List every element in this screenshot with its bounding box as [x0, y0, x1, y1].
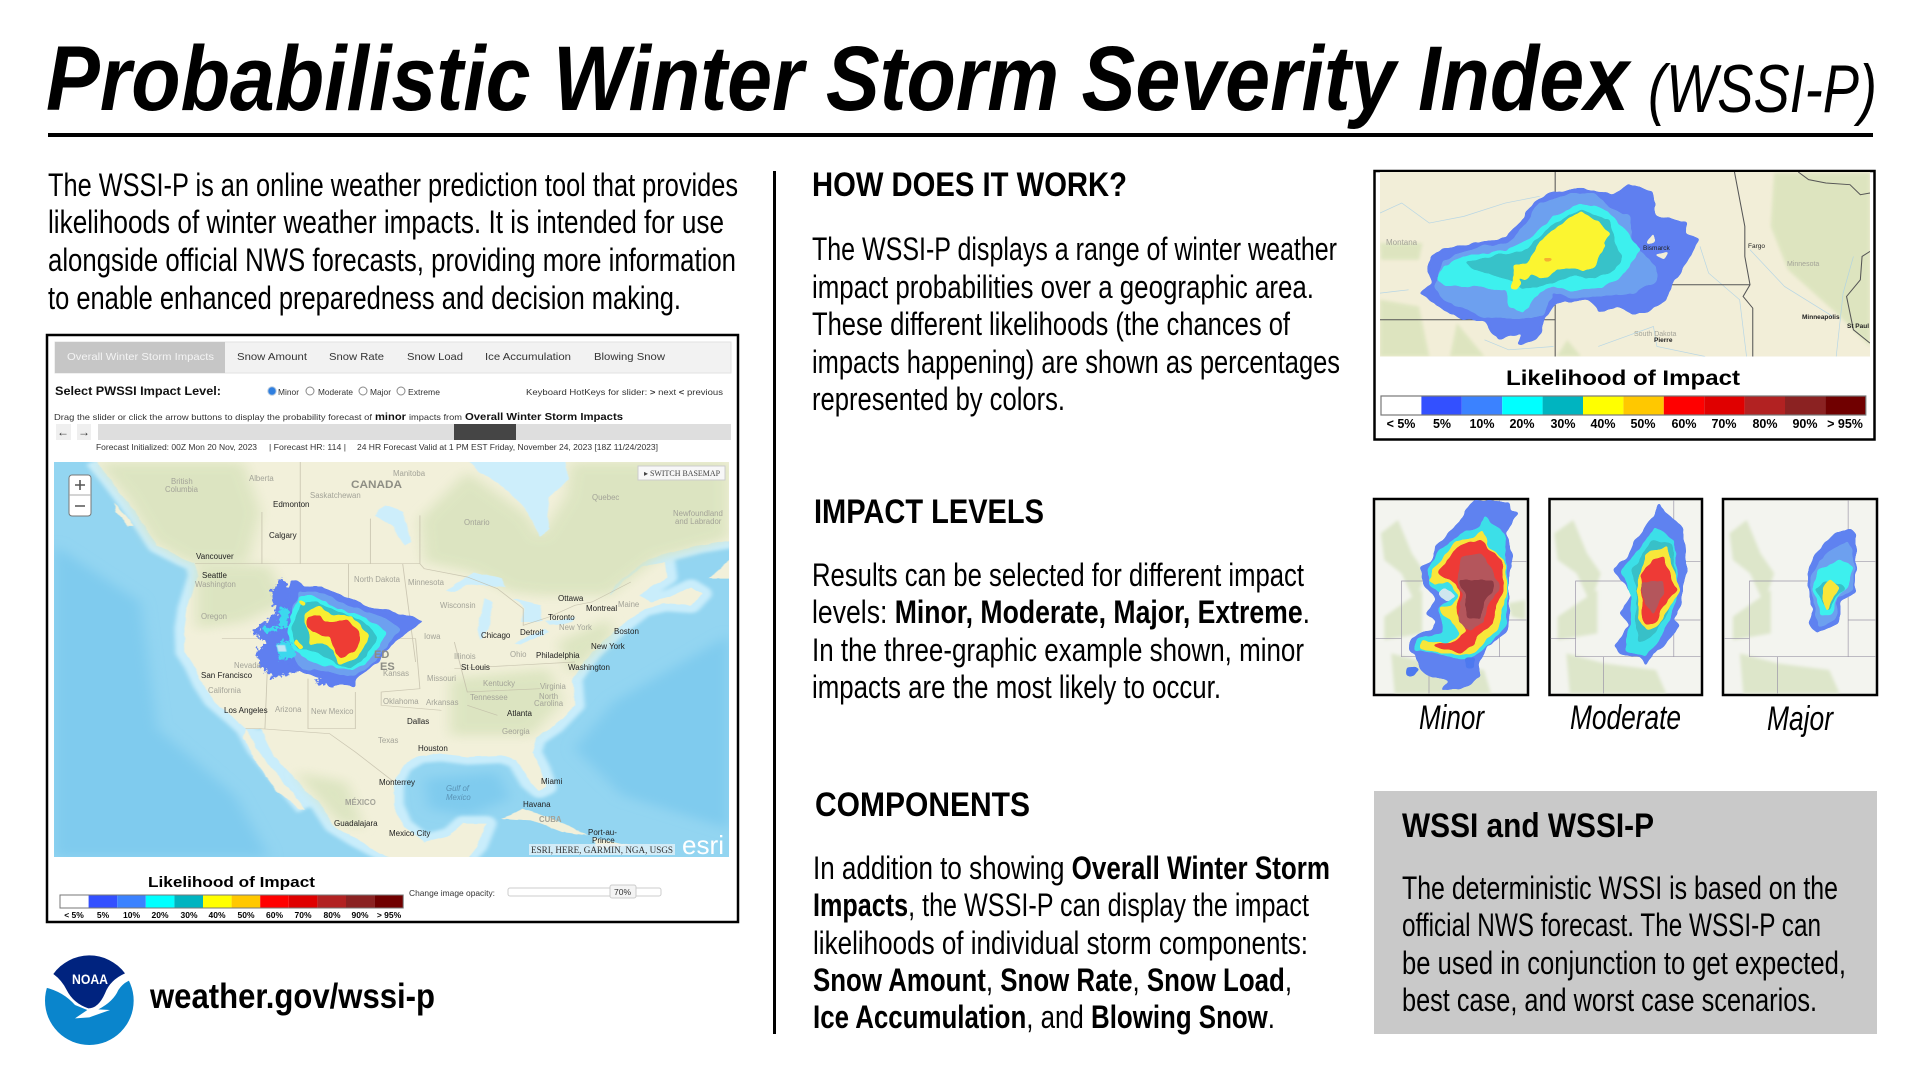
switch basemap button: ▸ SWITCH BASEMAP	[644, 469, 721, 478]
text: impact levels	[812, 557, 1310, 705]
intro text: to enable enhanced preparedness and decision making.	[48, 280, 681, 316]
forecast time text: Forecast Initialized: 00Z Mon 20 Nov, 2023	[96, 443, 258, 452]
forecast time text	[96, 443, 658, 452]
map labels: Washington	[195, 580, 236, 589]
map labels: ES	[380, 661, 395, 673]
map labels: Oregon	[201, 612, 227, 621]
text: components: Ice Accumulation, and Blowing Snow.	[813, 999, 1275, 1035]
text: components: likelihoods of individual storm components:	[813, 925, 1308, 961]
panel: WSSI and WSSI-P	[1374, 791, 1877, 1034]
intro text: The WSSI-P is an online weather prediction tool that provides	[48, 167, 738, 203]
map labels: Newfoundland	[673, 509, 723, 518]
map labels: MÉXICO	[345, 798, 376, 807]
website URL: weather.gov/wssi-p	[149, 977, 435, 1016]
map labels: Miami	[541, 777, 563, 786]
tab bar: Overall Winter Storm Impacts	[67, 351, 214, 363]
intro text: alongside official NWS forecasts, providing more information	[48, 242, 736, 278]
map labels: New York	[559, 623, 592, 632]
legend labels: 80%	[1752, 417, 1778, 431]
impact level selector: Minor	[278, 387, 299, 397]
map: moderate impacts	[1550, 499, 1702, 695]
text: impact levels: In the three-graphic example shown, minor	[812, 632, 1304, 668]
map labels: South Dakota	[1634, 331, 1677, 338]
map labels: Toronto	[548, 613, 575, 622]
screenshot legend: 40%	[208, 910, 226, 920]
text: components	[813, 850, 1330, 1035]
tab bar: Ice Accumulation	[485, 351, 571, 363]
screenshot legend: 30%	[180, 910, 198, 920]
map labels: Port-au-	[588, 828, 617, 837]
panel text: best case, and worst case scenarios.	[1402, 982, 1817, 1018]
screenshot legend: 50%	[237, 910, 255, 920]
land	[95, 460, 731, 859]
map labels: Arkansas	[426, 698, 459, 707]
map labels: Philadelphia	[536, 651, 580, 660]
map labels: Gulf of	[446, 784, 470, 793]
map labels: CANADA	[351, 479, 402, 491]
map attribution and esri logo: esri	[682, 830, 724, 860]
legend labels: 90%	[1792, 417, 1818, 431]
screenshot legend: 10%	[123, 910, 140, 920]
screenshot legend: < 5%	[64, 910, 84, 920]
legend labels: 10%	[1469, 417, 1495, 431]
map labels: North Dakota	[354, 575, 401, 584]
map labels: Texas	[378, 736, 398, 745]
caption: Major: Major	[1767, 700, 1834, 738]
forecast time slider: →	[78, 425, 90, 439]
map labels: Alberta	[249, 474, 274, 483]
baja and islands	[114, 502, 731, 849]
opacity slider: Change image opacity:	[409, 888, 495, 898]
screenshot legend: > 95%	[377, 910, 402, 920]
slider instructions: Drag the slider or click the arrow buttons to display the probability forecast of	[54, 412, 373, 422]
forecast time slider	[56, 424, 731, 440]
map labels: and Labrador	[675, 517, 722, 526]
screenshot legend: 80%	[323, 910, 341, 920]
hudson bay and lakes	[375, 460, 575, 645]
map labels: Virginia	[540, 682, 567, 691]
text: components: In addition to showing Overall Winter Storm	[813, 850, 1330, 886]
intro text: likelihoods of winter weather impacts. It is intended for use	[48, 204, 724, 240]
map of North America with probability overlay	[54, 460, 731, 920]
NOAA logo: NOAA	[72, 971, 108, 987]
map labels: Minnesota	[408, 578, 445, 587]
map attribution and esri logo	[529, 830, 724, 860]
legend labels: 20%	[1509, 417, 1535, 431]
text: impact levels: impacts are the most likely to occur.	[812, 669, 1221, 705]
map labels: Illinois	[454, 652, 476, 661]
map labels: Mexico City	[389, 829, 430, 838]
slider instructions: minor	[375, 411, 406, 423]
map labels: Carolina	[534, 699, 564, 708]
opacity slider	[409, 885, 661, 898]
map labels: Ottawa	[558, 594, 584, 603]
screenshot legend: 20%	[151, 910, 169, 920]
impact level selector: Extreme	[408, 387, 440, 397]
map attribution and esri logo: ESRI, HERE, GARMIN, NGA, USGS	[531, 845, 673, 855]
forest and mountain tints	[97, 462, 729, 829]
map labels: CUBA	[539, 815, 562, 824]
tab bar: Blowing Snow	[594, 351, 665, 363]
slider instructions	[54, 411, 623, 423]
text: how does it work: impacts happening) are shown as percentages	[812, 344, 1340, 380]
map: major impacts	[1723, 499, 1877, 695]
map labels: Nevada	[234, 661, 262, 670]
column divider	[773, 171, 776, 1034]
map labels: New Mexico	[311, 707, 354, 716]
panel text	[1402, 870, 1846, 1018]
forecast time slider: ←	[57, 425, 69, 439]
text: components: Snow Amount, Snow Rate, Snow Load,	[813, 962, 1292, 998]
map labels: Kentucky	[483, 679, 515, 688]
heading: impact levels: IMPACT LEVELS	[814, 493, 1044, 531]
text: how does it work: represented by colors.	[812, 381, 1065, 417]
map labels: California	[208, 686, 242, 695]
panel: likelihood map with legend	[1374, 171, 1874, 440]
legend labels: < 5%	[1387, 417, 1415, 431]
forecast time text: 24 HR Forecast Valid at 1 PM EST Friday, November 24, 2023 [18Z 11/24/2023]	[357, 443, 658, 452]
legend color bar	[1381, 396, 1866, 415]
map labels: St Paul	[1847, 323, 1869, 330]
map labels: Los Angeles	[224, 706, 268, 715]
map labels: Vancouver	[196, 552, 234, 561]
map labels: Boston	[614, 627, 639, 636]
text: impact levels: levels: Minor, Moderate, Major, Extreme.	[812, 594, 1310, 630]
deep water shading	[54, 545, 729, 857]
map labels: Ontario	[464, 518, 490, 527]
tab bar: Snow Rate	[329, 351, 384, 363]
map labels: Manitoba	[393, 469, 426, 478]
screenshot legend	[60, 874, 403, 920]
forecast time text: | Forecast HR: 114 |	[269, 443, 346, 452]
impact level selector	[55, 386, 723, 398]
map labels: British	[171, 477, 193, 486]
heading: how does it work: HOW DOES IT WORK?	[812, 166, 1127, 204]
screenshot legend: Likelihood of Impact	[148, 874, 315, 891]
impact level selector: Moderate	[318, 387, 353, 397]
map labels: Quebec	[592, 493, 619, 502]
map labels: St Louis	[461, 663, 490, 672]
storm probability overlay	[250, 578, 422, 688]
map labels: Minneapolis	[1802, 314, 1840, 321]
legend labels: 5%	[1433, 417, 1451, 431]
map labels: Calgary	[269, 531, 297, 540]
map labels: Minnesota	[1787, 261, 1819, 268]
map labels: San Francisco	[201, 671, 253, 680]
panel heading: WSSI and WSSI-P	[1402, 807, 1654, 845]
map labels: Columbia	[165, 485, 199, 494]
heading: components: COMPONENTS	[815, 786, 1030, 824]
opacity slider: 70%	[614, 887, 631, 897]
map labels: Missouri	[427, 674, 456, 683]
switch basemap button	[638, 466, 725, 480]
map labels: Havana	[523, 800, 551, 809]
screenshot legend: 60%	[266, 910, 283, 920]
map labels: Montreal	[586, 604, 617, 613]
map: minor impacts	[1374, 499, 1528, 695]
legend labels: 30%	[1550, 417, 1576, 431]
text: how does it work: impact probabilities over a geographic area.	[812, 269, 1314, 305]
map labels: Maine	[618, 600, 639, 609]
legend labels: 50%	[1630, 417, 1656, 431]
tab bar: Snow Load	[407, 351, 463, 363]
fragmented fringe	[252, 578, 303, 678]
impact level selector: Select PWSSI Impact Level:	[55, 386, 221, 398]
map labels: Guadalajara	[334, 819, 378, 828]
impact level selector: Keyboard HotKeys for slider: > next < previous	[526, 387, 723, 397]
map labels	[1386, 238, 1869, 344]
map labels: Kansas	[383, 669, 409, 678]
title: Probabilistic Winter Storm Severity Index	[46, 28, 1632, 130]
tab bar: Snow Amount	[237, 351, 307, 363]
map labels: Wisconsin	[440, 601, 476, 610]
map labels: Saskatchewan	[310, 491, 361, 500]
map labels: Prince	[592, 836, 615, 845]
map labels: Oklahoma	[383, 697, 419, 706]
NOAA logo	[45, 955, 134, 1045]
map labels: Arizona	[275, 705, 302, 714]
map labels: Pierre	[1654, 337, 1673, 344]
map labels: Seattle	[202, 571, 227, 580]
map labels: Chicago	[481, 631, 511, 640]
text: impact levels: Results can be selected for different impact	[812, 557, 1304, 593]
screenshot legend: 5%	[97, 910, 110, 920]
map labels: Mexico	[446, 793, 471, 802]
text: how does it work	[812, 231, 1340, 417]
fringe streaks and salt lake gap	[263, 607, 297, 660]
screenshot legend: 90%	[351, 910, 369, 920]
text: how does it work: These different likelihoods (the chances of	[812, 306, 1290, 342]
map labels: Edmonton	[273, 500, 309, 509]
map labels: North	[539, 692, 558, 701]
tab bar	[55, 342, 731, 373]
map: northern plains probabilities	[1380, 172, 1870, 356]
map labels: Fargo	[1748, 243, 1765, 250]
map labels	[165, 469, 723, 845]
map labels: Bismarck	[1643, 245, 1670, 252]
legend labels: 70%	[1711, 417, 1737, 431]
map labels: Detroit	[520, 628, 544, 637]
legend labels: > 95%	[1827, 417, 1863, 431]
map labels: Montana	[1386, 238, 1418, 247]
map labels: Washington	[568, 663, 610, 672]
coastal shelf	[95, 460, 731, 857]
legend labels: 40%	[1590, 417, 1616, 431]
map labels: Tennessee	[470, 693, 508, 702]
screenshot legend: 70%	[294, 910, 312, 920]
map labels: Atlanta	[507, 709, 532, 718]
map labels: ED	[374, 649, 389, 661]
map labels: New York	[591, 642, 626, 651]
text: components: Impacts, the WSSI-P can display the impact	[813, 887, 1309, 923]
panel: WSSI-P web tool screenshot	[45, 166, 1877, 1045]
map labels: Georgia	[502, 727, 530, 736]
map zoom control	[69, 475, 91, 516]
caption: Moderate: Moderate	[1570, 699, 1681, 737]
text: how does it work: The WSSI-P displays a range of winter weather	[812, 231, 1337, 267]
map labels: Monterrey	[379, 778, 415, 787]
legend labels: 60%	[1671, 417, 1697, 431]
legend labels	[1387, 417, 1863, 431]
caption: Minor: Minor	[1419, 699, 1485, 737]
slider instructions: Overall Winter Storm Impacts	[465, 411, 623, 423]
intro text	[48, 167, 738, 316]
map labels: Dallas	[407, 717, 429, 726]
map labels: Iowa	[424, 632, 441, 641]
map labels: Ohio	[510, 650, 527, 659]
legend title: Likelihood of Impact	[1506, 367, 1740, 390]
impact level selector: Major	[370, 387, 391, 397]
slider instructions: impacts from	[409, 412, 462, 422]
map labels: Houston	[418, 744, 448, 753]
